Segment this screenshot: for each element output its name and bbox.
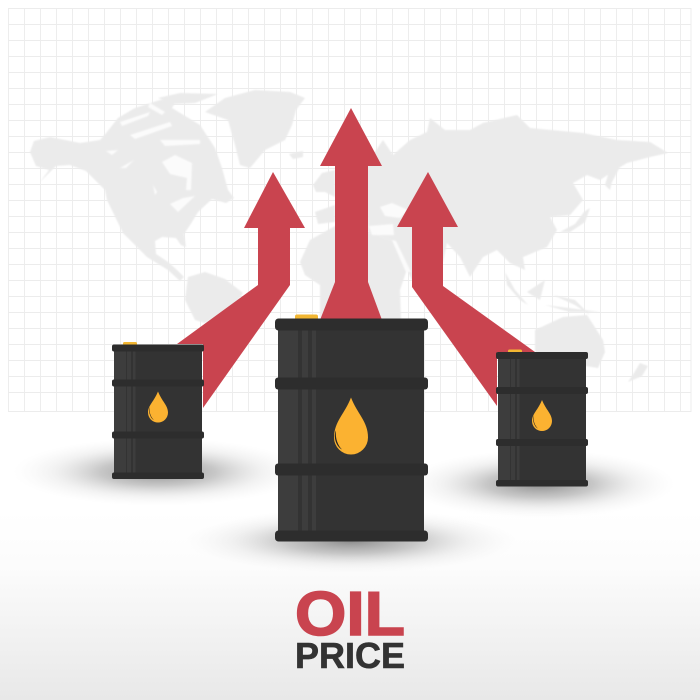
title: OIL: OIL	[295, 580, 405, 649]
cap	[508, 350, 522, 354]
arrow: center	[320, 108, 382, 320]
barrel: center	[275, 314, 428, 542]
arrow: right	[397, 172, 535, 406]
body	[498, 356, 586, 484]
cap	[123, 342, 137, 346]
North America	[30, 98, 234, 281]
Africa	[300, 226, 406, 320]
hoops	[112, 344, 204, 479]
subtitle: PRICE: PRICE	[295, 635, 405, 676]
Hudson Bay, lakes and arctic channels	[106, 103, 200, 212]
shadow: center barrel	[186, 509, 516, 573]
arctic island	[158, 93, 218, 104]
Black Sea and Mediterranean	[369, 203, 411, 272]
barrel: right	[496, 350, 588, 486]
Australia	[535, 315, 605, 368]
oil drop	[532, 400, 552, 431]
British Isles	[313, 170, 335, 197]
oil drop	[148, 392, 168, 422]
Southeast Asia	[505, 272, 600, 315]
Eurasia	[366, 115, 668, 280]
world map	[30, 90, 668, 382]
barrel: left	[112, 342, 204, 479]
hoops	[275, 318, 428, 542]
hoops	[496, 352, 588, 486]
arrow: left	[177, 172, 305, 408]
Iberia	[315, 205, 335, 224]
body	[114, 348, 202, 476]
cap	[295, 314, 318, 320]
New Zealand	[628, 363, 648, 382]
shadow: right barrel	[405, 450, 675, 518]
Greenland	[205, 90, 305, 168]
Sakhalin and Japan	[560, 163, 622, 232]
shadow: left barrel	[13, 438, 303, 506]
Iceland	[289, 151, 303, 159]
body	[278, 324, 424, 538]
South America	[185, 272, 243, 323]
oil drop	[334, 398, 368, 454]
